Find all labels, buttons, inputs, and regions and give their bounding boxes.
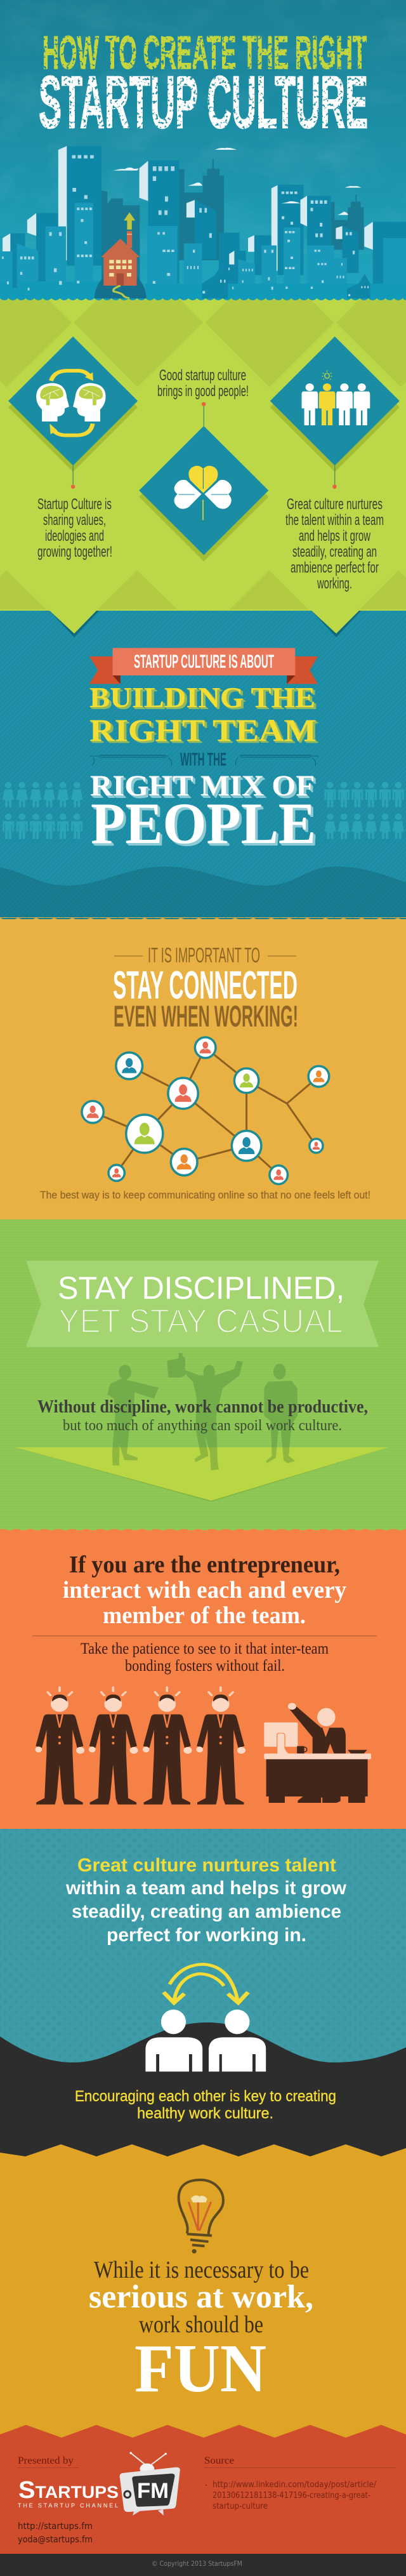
- illustration: team and boss at desk: [36, 1687, 371, 1805]
- diamond: talent: [270, 336, 400, 489]
- text: perfect for working: perfect for working in.: [107, 1925, 306, 1946]
- heading: people: PEOPLE: [91, 791, 316, 856]
- text: good startup culture: [157, 367, 249, 400]
- text: it is important to: IT IS IMPORTANT TO: [148, 943, 260, 967]
- text: with the: WITH THE: [180, 750, 226, 770]
- silhouettes: three businessmen: [107, 1353, 298, 1470]
- text: startup culture is sharing: Startup Culture is: [37, 496, 112, 513]
- panel: header skyline: [0, 0, 406, 326]
- panel: building the right team: [0, 609, 406, 919]
- text: good startup culture: Good startup culture: [159, 367, 246, 384]
- text: startup culture is sharing: ideologies and: [45, 528, 104, 545]
- logo: startups fm: [18, 2452, 180, 2516]
- heading: right team: RIGHT TEAM: [89, 712, 317, 748]
- panel: work should be fun: [0, 2144, 406, 2444]
- text: work should be: work should be: [139, 2311, 263, 2338]
- panel: footer credits: [0, 2425, 406, 2576]
- text: contact details: http://startups.fm: [18, 2521, 93, 2532]
- text: while it is necessary: While it is necessary to be: [94, 2257, 309, 2283]
- copyright bar: [0, 2554, 406, 2576]
- copyright bar: © Copyright 2013 StartupsFM: [152, 2559, 242, 2568]
- ribbon banner: [89, 648, 318, 684]
- text: great culture nurtures: working.: [317, 575, 352, 592]
- dark wave: [0, 2022, 406, 2158]
- heading: building the: BUILDING THE: [89, 681, 315, 714]
- connector: [334, 465, 336, 484]
- panel: green values: [0, 298, 406, 609]
- label: source: Source: [204, 2455, 234, 2466]
- connector: [203, 406, 205, 426]
- heading: great culture: Great culture nurtures talent: [77, 1855, 336, 1876]
- banner shape: [26, 1261, 379, 1347]
- diamond: shared values: [8, 336, 138, 489]
- logo: startups fm: FM: [137, 2479, 169, 2503]
- heading: stay disciplined: STAY DISCIPLINED,: [58, 1270, 344, 1306]
- panel: great culture nurtures talent: [0, 1829, 406, 2158]
- icon: house with upward arrow: [95, 212, 147, 326]
- icon: two heads with arrows: [36, 371, 106, 435]
- text: good startup culture: brings in good people!: [157, 383, 249, 400]
- panel: entrepreneur: [0, 1528, 406, 1829]
- text: source link: 20130612181138-417196-creating-a-great-: [213, 2491, 370, 2500]
- heading: fun: FUN: [134, 2331, 266, 2407]
- text: but too much: but too much of anything can spoil work culture.: [63, 1417, 342, 1434]
- panel: stay disciplined: [0, 1219, 406, 1530]
- wave: [0, 866, 406, 919]
- green pointers: [49, 610, 362, 637]
- icon: two people exchanging arrows: [145, 1964, 266, 2071]
- text: source link: http://www.linkedin.com/today/post/article/: [213, 2480, 377, 2490]
- text: startup culture is sharing: growing together!: [37, 543, 112, 561]
- text: source link: [206, 2480, 377, 2511]
- divider: [32, 1635, 377, 1637]
- diamond: clover: [139, 402, 268, 561]
- icon: four people with lightbulb: [302, 370, 370, 425]
- caption: The best way is to keep communicating online so that no one feels left out!: [40, 1189, 370, 1201]
- text: contact details: [18, 2521, 93, 2545]
- heading: serious at work: serious at work,: [89, 2279, 313, 2315]
- text: bonding fosters: bonding fosters without fail.: [125, 1657, 285, 1675]
- text: contact details: yoda@startups.fm: [18, 2535, 93, 2545]
- people rows: [3, 782, 404, 839]
- label: presented by: Presented by: [18, 2455, 74, 2466]
- heading: member of the team: member of the team.: [103, 1602, 306, 1629]
- logo: startups fm: Startups: [18, 2477, 119, 2504]
- text: healthy work culture: healthy work culture.: [137, 2105, 273, 2122]
- arrow shape: [15, 1447, 388, 1502]
- text: source link: startup-culture: [213, 2502, 268, 2511]
- text: great culture nurtures: [285, 496, 384, 592]
- ribbon text: STARTUP CULTURE IS ABOUT: [134, 651, 274, 672]
- text: without discipline: Without discipline, work cannot be productive,: [37, 1397, 368, 1417]
- heading: entrepreneur: If you are the entrepreneur,: [69, 1551, 340, 1578]
- icon: clover: [174, 466, 232, 520]
- text: steadily: steadily, creating an ambience: [72, 1901, 341, 1922]
- text: startup culture is sharing: sharing values,: [43, 512, 106, 529]
- connector: [72, 465, 74, 484]
- illustration: city skyline with house: [0, 146, 406, 326]
- heading: yet stay casual: YET STAY CASUAL: [58, 1303, 343, 1340]
- heading: interact: interact with each and every: [63, 1577, 346, 1603]
- network diagram: [82, 1037, 329, 1184]
- flourishes: [89, 755, 318, 766]
- logo: startups fm: THE STARTUP CHANNEL: [18, 2502, 118, 2509]
- text: startup culture is sharing: [37, 496, 112, 561]
- panel: stay connected: [0, 915, 406, 1219]
- text: take the patience: Take the patience to see to it that inter-team: [81, 1640, 329, 1657]
- icon: lightbulb: [179, 2180, 223, 2254]
- text: within a team: within a team and helps it grow: [65, 1878, 347, 1899]
- heading: right mix of: RIGHT MIX OF: [90, 769, 315, 802]
- icon: desk with boss: [264, 1703, 371, 1803]
- flourish lines: [114, 955, 296, 957]
- text: encouraging: Encouraging each other is key to creating: [75, 2088, 336, 2105]
